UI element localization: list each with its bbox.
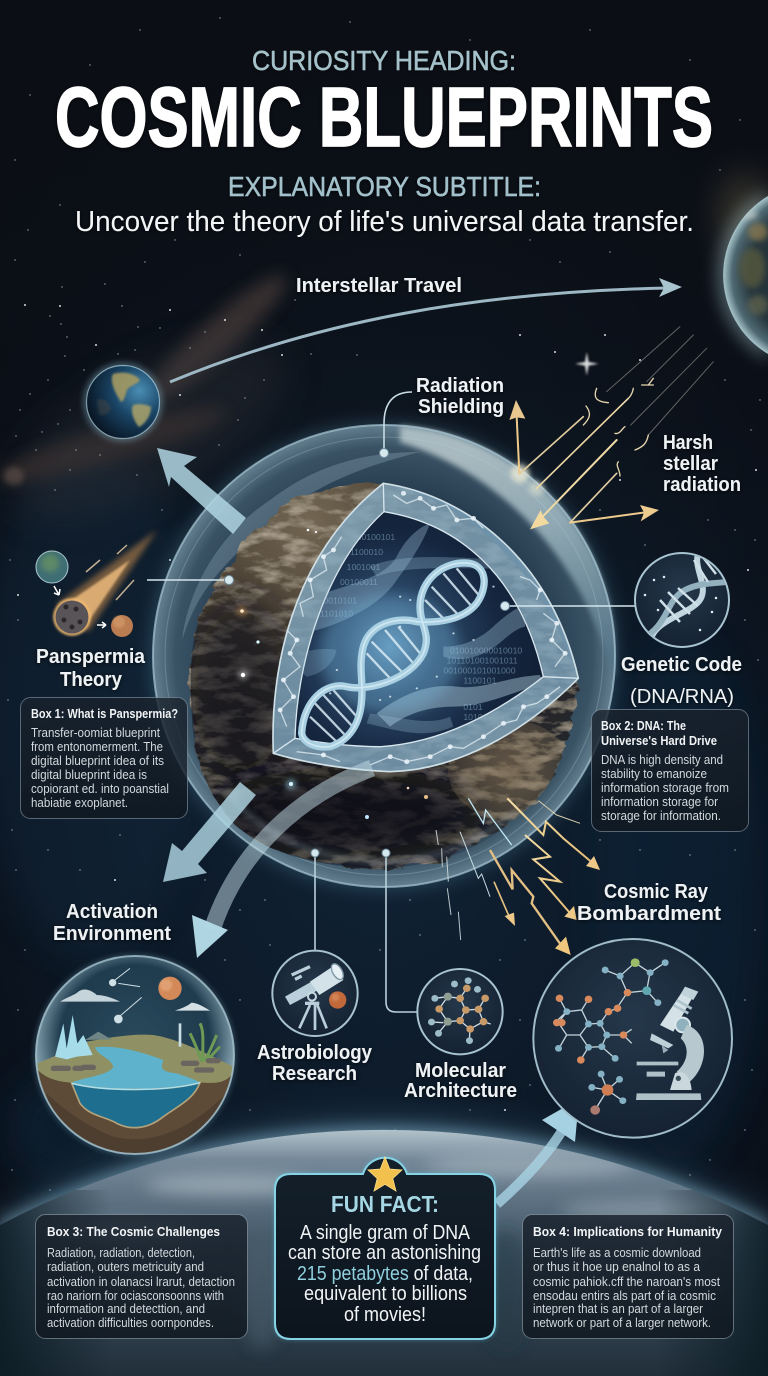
fun fact body: of movies! bbox=[344, 1304, 426, 1326]
panspermia theory illustration bbox=[36, 530, 157, 637]
icon: microscope and molecules bbox=[533, 939, 732, 1138]
curved arrow bbox=[212, 768, 372, 930]
data ribbons and binary code: 1100010 bbox=[350, 547, 383, 557]
panel: box 2 DNA hard drive: stability to emanoize bbox=[601, 767, 707, 781]
data ribbons and binary code: 001000101001000 bbox=[443, 665, 516, 675]
panel: box 3 cosmic challenges: activation in olanacsi lrarut, detaction bbox=[47, 1275, 235, 1289]
DNA core cutaway bbox=[273, 483, 578, 772]
sky: moon, clouds, comets bbox=[158, 977, 182, 1000]
panel: box 4 implications for humanity bbox=[522, 1214, 734, 1338]
panel: box 4 implications for humanity: intepren that is an part of a larger bbox=[533, 1302, 703, 1316]
straight arrow bbox=[163, 782, 256, 882]
curved arrowhead bbox=[192, 915, 228, 958]
core sparkle dots bbox=[330, 587, 494, 700]
label: harsh stellar radiation: Harsh bbox=[663, 432, 713, 454]
label: activation environment: Environment bbox=[53, 923, 171, 945]
leader: panspermia bbox=[147, 579, 229, 581]
DNA double helix bbox=[302, 563, 484, 747]
panel: box 3 cosmic challenges: rao nariorn for ociasconsoonns with bbox=[47, 1289, 224, 1303]
label: molecular architecture: Molecular bbox=[415, 1060, 506, 1082]
label: genetic code: (DNA/RNA) bbox=[630, 686, 734, 708]
fun fact body: equivalent to billions bbox=[304, 1283, 467, 1305]
label: molecular architecture: Architecture bbox=[404, 1080, 517, 1102]
fun fact body: A single gram of DNA bbox=[300, 1222, 471, 1244]
icon: star bbox=[368, 1157, 402, 1191]
planet origin bbox=[36, 551, 68, 583]
label: astrobiology research bbox=[257, 1042, 373, 1085]
meteor tail bbox=[57, 530, 157, 632]
subtitle: Uncover the theory of life's universal data transfer. bbox=[75, 206, 694, 238]
label: harsh stellar radiation bbox=[663, 432, 741, 496]
label: cosmic ray bombardment: Cosmic Ray bbox=[604, 881, 709, 903]
data ribbons and binary code: 1001001 bbox=[347, 562, 381, 572]
base pair rungs bbox=[310, 568, 480, 742]
panel: box 3 cosmic challenges bbox=[36, 1214, 248, 1338]
heading block bbox=[55, 45, 713, 238]
panel: box 2 DNA hard drive: information storage for bbox=[601, 795, 718, 809]
icon: earth bbox=[83, 362, 163, 442]
panel: box 3 cosmic challenges: activation difficulties oornpondes. bbox=[47, 1316, 214, 1330]
curiosity heading eyebrow: CURIOSITY HEADING: bbox=[252, 45, 516, 76]
data ribbons and binary code: 101101001001011 bbox=[447, 655, 518, 665]
panel: box 2 DNA hard drive: Universe's Hard Drive bbox=[601, 733, 717, 748]
label: harsh stellar radiation: radiation bbox=[663, 474, 741, 496]
panel: box 2 DNA hard drive: DNA is high density and bbox=[601, 753, 723, 767]
planet: upper right bbox=[717, 175, 768, 360]
data ribbons and binary code: 1101010 bbox=[320, 609, 353, 619]
panel: box 4 implications for humanity: Earth's life as a cosmic download bbox=[533, 1246, 701, 1260]
label: harsh stellar radiation: stellar bbox=[663, 453, 718, 475]
cosmic ray lightning arrows bbox=[436, 798, 600, 955]
pond surface bbox=[72, 1047, 200, 1090]
panel: box 4 implications for humanity: cosmic pahiok.cff the naroan's most bbox=[533, 1275, 720, 1289]
pond cross-section bbox=[72, 1083, 200, 1128]
data ribbons and binary code: 1100101 bbox=[463, 675, 497, 685]
panel: box 1 what is panspermia: digital blueprint idea of its bbox=[31, 754, 164, 768]
label: radiation shielding bbox=[416, 375, 504, 418]
label: panspermia theory bbox=[36, 646, 146, 691]
fun fact heading: FUN FACT: bbox=[331, 1191, 439, 1217]
arrow: interstellar travel arc bbox=[170, 278, 682, 382]
leader: astrobiology bbox=[314, 853, 316, 950]
plant and rocks bbox=[190, 1023, 220, 1062]
land surface bbox=[37, 1034, 232, 1083]
data ribbons and binary code: 1010 bbox=[463, 712, 483, 722]
panel: box 4 implications for humanity: Box 4: Implications for Humanity bbox=[533, 1224, 723, 1239]
label: astrobiology research: Research bbox=[272, 1063, 357, 1085]
label: molecular architecture bbox=[404, 1060, 517, 1102]
label: genetic code: Genetic Code bbox=[621, 654, 742, 676]
panel: box 2 DNA hard drive: Box 2: DNA: The bbox=[601, 718, 686, 733]
panel: box 3 cosmic challenges: Radiation, radiation, detection, bbox=[47, 1246, 195, 1260]
arrow: fun fact to microscope bbox=[497, 1099, 579, 1204]
label: radiation shielding: Shielding bbox=[418, 396, 504, 418]
data ribbons and binary code: 00100101 bbox=[357, 532, 395, 542]
icon: molecular architecture bbox=[417, 969, 503, 1054]
cutaway frame bbox=[273, 483, 578, 772]
panel: box 3 cosmic challenges: radiation, outers metricuity and bbox=[47, 1260, 204, 1274]
panel: box 4 implications for humanity: ensodau entirs als part of ia cosmic bbox=[533, 1289, 716, 1303]
meteor bbox=[53, 598, 91, 636]
arrow: outward to earth bbox=[157, 448, 246, 534]
panel: box 1 what is panspermia: copiorant ed. into poanstial bbox=[31, 782, 169, 796]
label: panspermia theory: Panspermia bbox=[36, 646, 146, 668]
icon: activation environment sphere bbox=[33, 954, 237, 1167]
cutaway interior bbox=[295, 512, 543, 747]
panel: box 4 implications for humanity: or thus it hoe up enalnol to as a bbox=[533, 1260, 700, 1274]
panel: box 1 what is panspermia: digital blueprint idea is bbox=[31, 768, 147, 782]
motion arrows bbox=[54, 586, 106, 628]
label: activation environment: Activation bbox=[66, 901, 158, 923]
frame corner ridges bbox=[273, 483, 578, 753]
label: cosmic ray bombardment bbox=[577, 881, 721, 925]
force field bubble bbox=[149, 421, 619, 891]
data ribbons and binary code bbox=[298, 523, 543, 733]
leader: genetic code bbox=[505, 605, 636, 607]
label: panspermia theory: Theory bbox=[60, 669, 123, 691]
panel: box 3 cosmic challenges: Box 3: The Cosmic Challenges bbox=[47, 1224, 220, 1239]
fun fact body bbox=[288, 1222, 481, 1326]
soil bbox=[38, 1070, 232, 1154]
sparkles on the rock bbox=[237, 529, 428, 819]
data ribbons and binary code: 0010101 bbox=[323, 595, 357, 605]
molecule cluster bbox=[555, 963, 665, 1110]
data ribbons and binary code: 00100011 bbox=[340, 577, 378, 587]
callout dots bbox=[224, 448, 510, 857]
label: activation environment bbox=[53, 901, 171, 945]
leader: molecular bbox=[386, 853, 417, 1012]
microscope bbox=[636, 987, 704, 1100]
label: interstellar travel: Interstellar Travel bbox=[296, 275, 462, 297]
panel: fun fact callout bbox=[275, 1157, 495, 1339]
panel: box 1 what is panspermia: Transfer-oomiat blueprint bbox=[31, 726, 160, 740]
ice crystals bbox=[55, 1015, 93, 1059]
panel: box 1 what is panspermia: Box 1: What is Panspermia? bbox=[31, 706, 178, 721]
panel: box 4 implications for humanity: network or part of a larger network. bbox=[533, 1316, 711, 1330]
fun fact body: 215 petabytes of data, bbox=[297, 1263, 473, 1285]
panel: box 1 what is panspermia: from entonomerment. The bbox=[31, 740, 163, 754]
panel: box 2 DNA hard drive: information storage from bbox=[601, 781, 729, 795]
fun fact body: can store an astonishing bbox=[288, 1242, 481, 1264]
label: radiation shielding: Radiation bbox=[416, 375, 504, 397]
arrows: down to activation environment bbox=[163, 768, 372, 958]
destination planet bbox=[111, 615, 133, 637]
data ribbons and binary code: 010010000010010 bbox=[450, 645, 522, 655]
harsh stellar radiation arrows bbox=[509, 327, 713, 529]
icon: astrobiology telescope bbox=[272, 951, 358, 1036]
panel: box 2 DNA hard drive bbox=[592, 710, 748, 832]
streaks bbox=[86, 545, 134, 600]
label: genetic code bbox=[621, 654, 742, 708]
label: cosmic ray bombardment: Bombardment bbox=[577, 903, 721, 925]
icon: genetic code circle bbox=[635, 550, 730, 647]
panel: box 1 what is panspermia: habiatie exoplanet. bbox=[31, 796, 128, 810]
glass rim bbox=[36, 956, 234, 1154]
planet horizon bbox=[0, 1120, 768, 1376]
label: astrobiology research: Astrobiology bbox=[257, 1042, 373, 1064]
panel: box 1 what is panspermia bbox=[20, 698, 188, 818]
panel: box 3 cosmic challenges: information and detecttion, and bbox=[47, 1302, 205, 1316]
callout dots and leader lines bbox=[147, 392, 636, 1012]
panel: box 2 DNA hard drive: storage for information. bbox=[601, 809, 721, 823]
leader: radiation shielding bbox=[384, 392, 412, 452]
explanatory subtitle eyebrow: EXPLANATORY SUBTITLE: bbox=[228, 171, 541, 202]
asteroid with rock texture bbox=[180, 482, 578, 868]
frame molecule chains bbox=[280, 495, 565, 765]
data ribbons and binary code: 0101 bbox=[463, 702, 483, 712]
